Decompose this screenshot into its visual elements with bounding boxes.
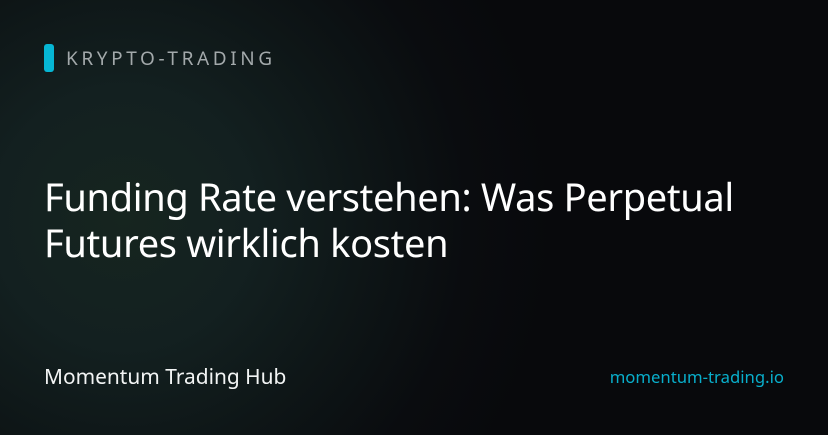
brand name: Momentum Trading Hub <box>44 363 286 391</box>
website url: momentum-trading.io <box>610 365 784 388</box>
title: Futures wirklich kosten <box>44 217 448 269</box>
title: Funding Rate verstehen: Was Perpetual <box>44 171 734 223</box>
title <box>44 171 734 269</box>
accent bar <box>44 44 54 72</box>
category label: KRYPTO-TRADING <box>66 45 276 71</box>
